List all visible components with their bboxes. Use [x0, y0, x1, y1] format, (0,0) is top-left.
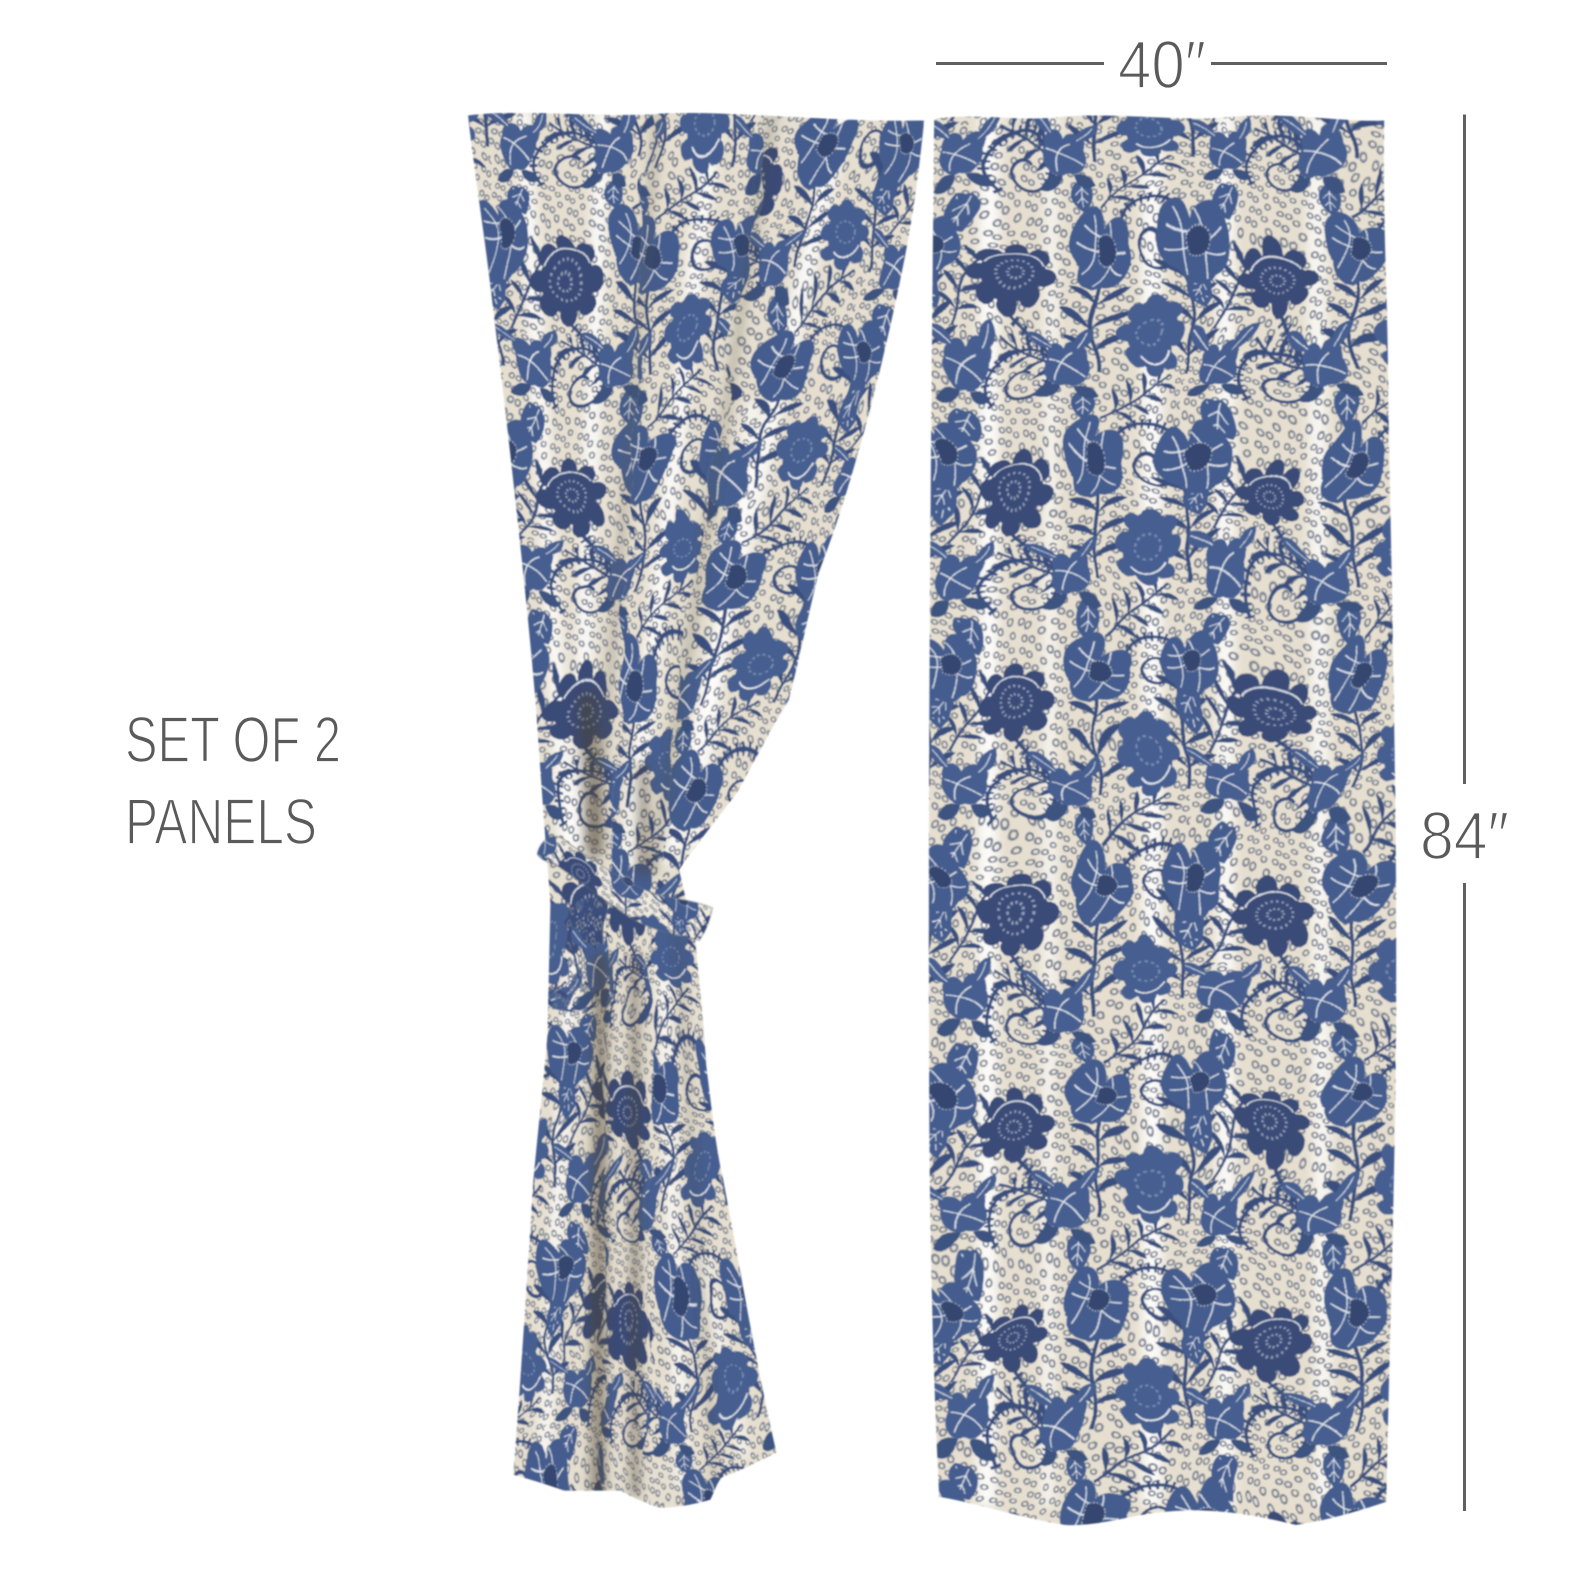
width dimension: 40 inches: 40″	[1118, 27, 1206, 103]
left curtain panel, gathered with tie-back	[467, 112, 925, 1508]
both curtain panels, at true image scale	[467, 112, 1398, 1526]
label: set of 2 panels	[125, 703, 341, 858]
right curtain panel, hanging flat	[928, 114, 1398, 1526]
height dimension: 84 inches: 84″	[1420, 798, 1509, 874]
label: set of 2 panels: SET OF 2	[125, 703, 341, 776]
label: set of 2 panels: PANELS	[125, 785, 317, 858]
curtain tie-back	[537, 836, 712, 940]
